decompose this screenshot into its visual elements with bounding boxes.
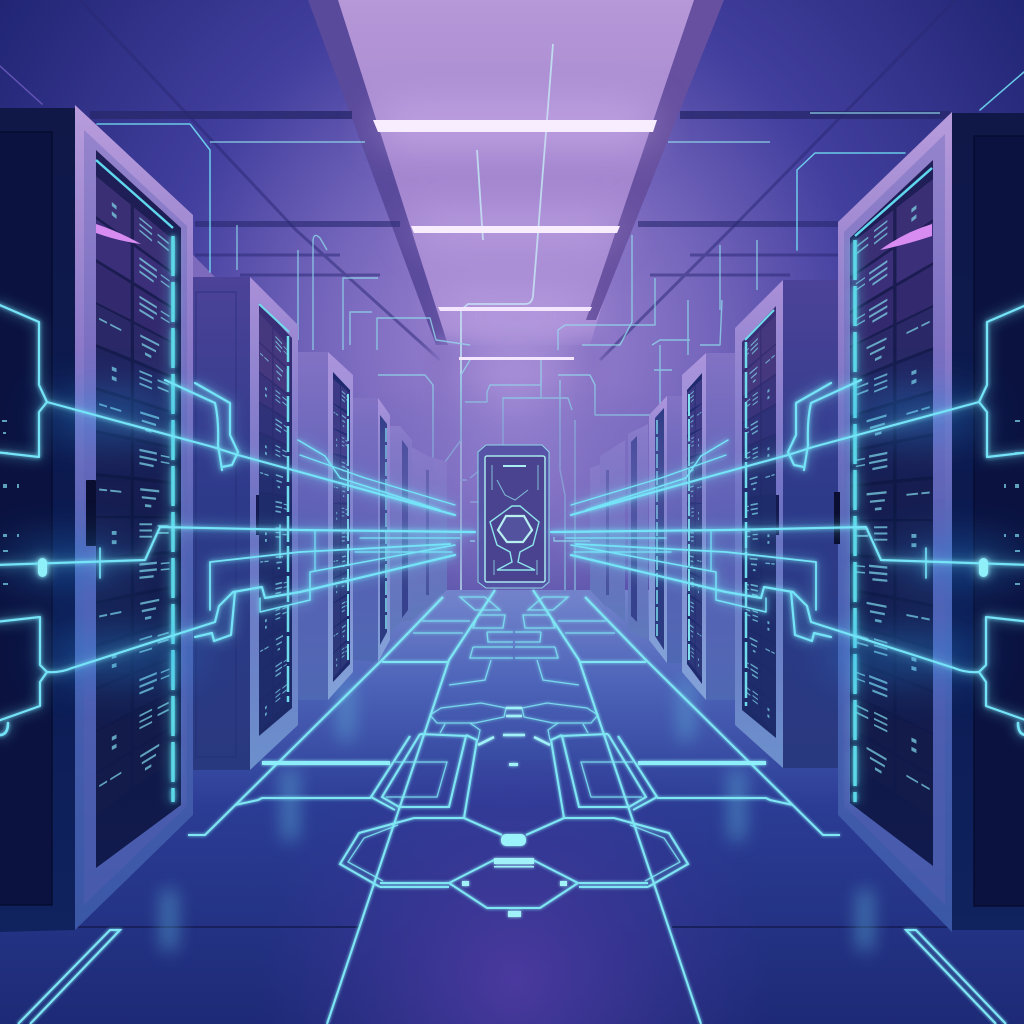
rack 8 left [425, 455, 447, 610]
hexagon bottom pin [508, 911, 521, 917]
hexagon top bar [494, 858, 534, 864]
door handle [834, 492, 840, 544]
rack 6 right [628, 424, 648, 640]
light strip 2 [411, 226, 620, 233]
centre wire [0, 525, 475, 610]
emblem diamond [498, 516, 532, 542]
door handle [86, 480, 96, 546]
central door with circuit emblem [478, 445, 549, 588]
floor central hexagon [449, 708, 578, 917]
emblem top bar [503, 465, 526, 467]
background ceiling and wall conduits [210, 44, 940, 590]
light strip 3 [438, 307, 592, 311]
centre wire node [38, 558, 47, 577]
status leds [2, 420, 19, 585]
distance haze over far racks [285, 375, 745, 605]
emblem outer ring [490, 506, 539, 570]
centre lane pin [509, 763, 518, 766]
cyan edge lights [96, 160, 173, 228]
rack 6 left [388, 426, 412, 636]
floor corner ticks [18, 930, 1006, 1024]
ceiling lights [373, 112, 657, 364]
side wall stubs near door [450, 532, 590, 541]
left main beam [308, 0, 448, 345]
bottle side [464, 735, 477, 818]
side panel [0, 108, 75, 932]
window [850, 160, 933, 866]
ceiling cross beams [90, 111, 950, 227]
rack 8 right [590, 462, 607, 608]
window [96, 150, 181, 868]
light glow [380, 112, 650, 364]
rack 4 left [298, 352, 353, 700]
floor seams [0, 926, 1024, 928]
bright cross bar [262, 761, 390, 765]
component box [382, 734, 466, 807]
frame [838, 112, 952, 932]
magenta reflection [880, 224, 932, 250]
hexagon side pins [462, 881, 469, 886]
left front rack [0, 105, 193, 932]
blue glow halos behind wires [0, 393, 1024, 677]
branch [235, 798, 371, 805]
server rows [96, 176, 175, 815]
outer aisle line [188, 597, 443, 835]
right main beam [586, 0, 724, 320]
rack 3 left [186, 252, 298, 770]
light strip 1 [373, 120, 657, 132]
mirrored data wires [551, 303, 1024, 735]
central node [501, 834, 526, 846]
floor circuit, left half [188, 590, 513, 1024]
upper cross bars [478, 708, 550, 745]
ceiling [0, 0, 1024, 600]
ceiling centre panel [336, 0, 696, 345]
side panel [950, 113, 1024, 930]
rack 7 left [410, 446, 435, 622]
far left racks [186, 252, 447, 770]
octagon loop [340, 818, 502, 887]
rack 5 right [649, 396, 682, 663]
stacked cells [470, 647, 513, 658]
floor [0, 590, 1024, 1024]
lower wire [0, 545, 455, 735]
floor circuit, right half [515, 590, 840, 1024]
frame [75, 105, 193, 930]
upper cell [430, 703, 506, 723]
right front rack [834, 112, 1024, 932]
magenta reflection [96, 224, 141, 244]
light strip 4 [459, 357, 574, 360]
upper rack conduits [0, 66, 1024, 272]
rack 3 right [735, 280, 846, 768]
status leds [1004, 420, 1021, 585]
rack 5 left [353, 398, 390, 662]
main lane line [327, 590, 495, 1024]
glowing data wires [0, 303, 475, 735]
server rows [850, 179, 933, 818]
rack 4 right [682, 353, 735, 700]
far right racks [590, 280, 846, 768]
cyan edge lights [855, 168, 932, 236]
back wall [430, 340, 602, 595]
ceiling grid beams [80, 0, 955, 360]
upper wire [0, 303, 455, 515]
emblem side traces [492, 465, 538, 575]
rack 7 right [600, 440, 625, 622]
floor light reflections [162, 680, 872, 950]
